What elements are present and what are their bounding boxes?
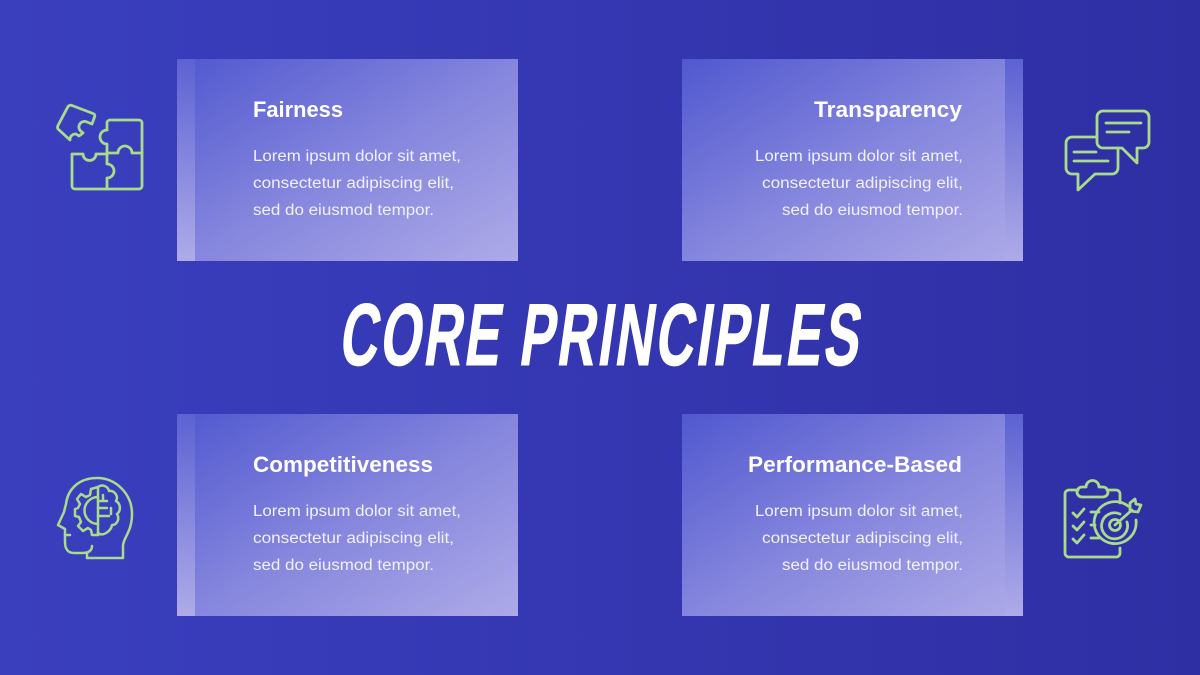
panel: Fairness [177,59,518,261]
text block: Competitiveness: consectetur adipiscing elit, [253,530,454,547]
heading: Competitiveness: Competitiveness [253,452,433,477]
text block: Competitiveness [253,503,461,574]
icon: speech bubbles [1066,111,1149,190]
text block: Transparency [755,148,963,219]
panel accent strip: Performance-Based [1005,414,1023,616]
heading: Performance-Based: Performance-Based [748,452,962,477]
text block: Fairness: consectetur adipiscing elit, [253,175,454,192]
text block: Competitiveness: sed do eiusmod tempor. [253,557,434,574]
text block: Performance-Based: sed do eiusmod tempor. [782,557,963,574]
text block: Transparency: consectetur adipiscing elit, [762,175,963,192]
text block: Performance-Based [755,503,963,574]
text block: Fairness: sed do eiusmod tempor. [253,202,434,219]
panel accent strip: Competitiveness [177,414,195,616]
panel: Transparency [682,59,1023,261]
text block: Competitiveness: Lorem ipsum dolor sit amet, [253,503,461,520]
text block: Fairness: Lorem ipsum dolor sit amet, [253,148,461,165]
icon: clipboard with target [1065,481,1141,557]
panel: Competitiveness [177,414,518,616]
panel: Performance-Based [682,414,1023,616]
text block: Transparency: sed do eiusmod tempor. [782,202,963,219]
text block: Fairness [253,148,461,219]
panel accent strip: Transparency [1005,59,1023,261]
text block: Transparency: Lorem ipsum dolor sit amet, [755,148,963,165]
heading: Transparency: Transparency [814,97,963,122]
text block: Performance-Based: Lorem ipsum dolor sit amet, [755,503,963,520]
text block: Performance-Based: consectetur adipiscing elit, [762,530,963,547]
heading: Fairness: Fairness [253,97,343,122]
icon: head with gear and brain [58,478,132,558]
panel accent strip: Fairness [177,59,195,261]
icon: puzzle pieces [58,105,142,189]
title: CORE PRINCIPLES [335,287,871,384]
